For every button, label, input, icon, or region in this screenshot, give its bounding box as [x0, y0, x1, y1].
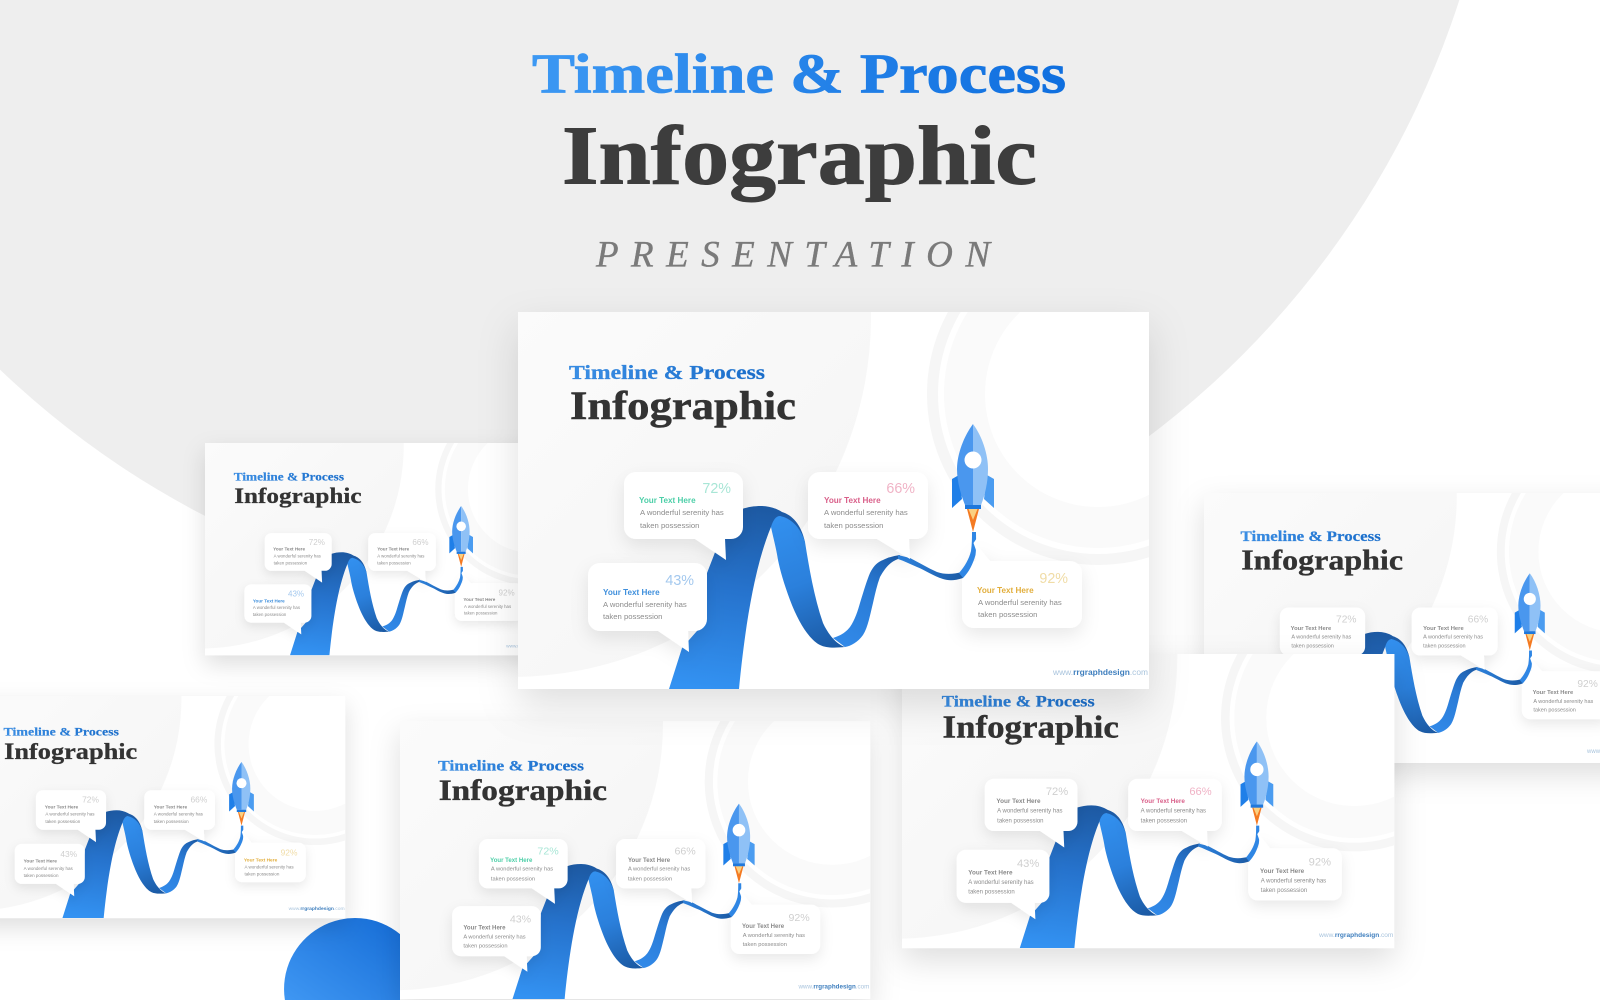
callout 72%: Your Text Here: [996, 798, 1041, 805]
callout 92%: 92%: [1039, 571, 1068, 587]
rocket: [952, 424, 994, 532]
callout 66%: 66%: [886, 481, 915, 497]
callout 66%: taken possession: [1141, 818, 1187, 824]
callout 72%: taken possession: [997, 818, 1044, 824]
callout 66%: taken possession: [154, 819, 189, 824]
callout 43%: Your Text Here: [1265, 692, 1306, 698]
callout 72%: Your Text Here: [639, 496, 696, 505]
callout 43%: 43%: [510, 913, 532, 925]
panel: front right slide: [616, 377, 1488, 948]
title: Timeline & Process: Timeline & Process: [532, 44, 1066, 106]
callout 66%: Your Text Here: [1423, 626, 1464, 632]
callout 43%: taken possession: [1265, 709, 1307, 715]
ribbon: [290, 552, 463, 655]
callout 72%: Your Text Here: [1291, 626, 1332, 632]
heading: Timeline & Process: [438, 758, 584, 774]
callout 72%: A wonderful serenity has: [1291, 634, 1352, 640]
callout 66%: A wonderful serenity has: [1141, 808, 1206, 814]
heading main: Infographic: [943, 709, 1119, 744]
callout 72%: taken possession: [491, 876, 535, 882]
callout 66%: A wonderful serenity has: [824, 508, 908, 517]
callout 66%: taken possession: [628, 876, 672, 882]
panel: back left slide: [198, 443, 518, 672]
callout 92%: Your Text Here: [1533, 690, 1574, 696]
callout 92%: taken possession: [743, 942, 787, 948]
callout 43%: A wonderful serenity has: [603, 600, 687, 609]
callout 43%: [957, 850, 1049, 919]
callout 92%: taken possession: [1261, 888, 1307, 894]
callout 43%: 43%: [665, 573, 694, 589]
callout 72%: 72%: [309, 538, 325, 547]
callout 72%: [985, 779, 1078, 847]
callout 43%: 43%: [60, 849, 78, 859]
callout 66%: [1128, 779, 1222, 847]
callout 72%: A wonderful serenity has: [640, 508, 724, 517]
callout 72%: [36, 790, 106, 842]
callout 72%: 72%: [537, 846, 559, 857]
callout 43%: taken possession: [968, 889, 1015, 895]
ribbon: [1020, 805, 1260, 948]
callout 92%: 92%: [281, 848, 298, 858]
callout 43%: Your Text Here: [463, 926, 506, 932]
callout 72%: A wonderful serenity has: [45, 812, 95, 817]
callout 92%: Your Text Here: [463, 597, 496, 602]
callout 66%: 66%: [674, 846, 696, 857]
callout 72%: [479, 839, 568, 904]
callout 92%: A wonderful serenity has: [1261, 879, 1326, 885]
callout 66%: [1412, 608, 1498, 670]
callout 92%: 92%: [499, 589, 515, 598]
callout 92%: [454, 590, 518, 626]
callout 43%: taken possession: [24, 873, 59, 878]
callout 72%: A wonderful serenity has: [491, 867, 553, 873]
callout 72%: 72%: [1046, 786, 1068, 798]
heading: Timeline & Process: [4, 725, 119, 738]
callout 72%: 72%: [1336, 615, 1357, 626]
callout 43%: taken possession: [463, 943, 508, 949]
rocket: [1241, 741, 1273, 826]
callout 92%: Your Text Here: [742, 924, 785, 930]
callout 72%: taken possession: [1291, 644, 1334, 650]
footer url: www.rrgraphdesign.com: [797, 984, 869, 991]
callout 43%: [15, 844, 85, 896]
callout 43%: A wonderful serenity has: [253, 605, 300, 610]
callout 92%: taken possession: [464, 611, 498, 616]
rocket: [1515, 573, 1545, 651]
callout 66%: taken possession: [1423, 644, 1466, 650]
callout 66%: taken possession: [377, 561, 411, 566]
callout 92%: A wonderful serenity has: [244, 865, 294, 870]
callout 66%: 66%: [1468, 615, 1488, 626]
callout 66%: A wonderful serenity has: [1423, 634, 1483, 640]
callout 92%: [235, 832, 306, 882]
callout 43%: 43%: [288, 590, 304, 599]
footer url: www.rrgraphdesign.com: [506, 643, 560, 649]
callout 66%: A wonderful serenity has: [628, 867, 690, 873]
callout 43%: 43%: [1310, 680, 1330, 691]
heading main: Infographic: [1241, 545, 1403, 577]
callout 92%: [1522, 658, 1600, 719]
callout 92%: taken possession: [1533, 707, 1576, 713]
callout 66%: 66%: [191, 795, 208, 805]
callout 92%: [962, 543, 1082, 628]
ribbon: [669, 506, 977, 689]
callout 72%: taken possession: [274, 561, 308, 566]
callout 92%: A wonderful serenity has: [1533, 699, 1594, 705]
rocket: [723, 804, 755, 883]
callout 92%: [1248, 834, 1342, 900]
footer url: www.rrgraphdesign.com: [1052, 667, 1148, 677]
callout 66%: A wonderful serenity has: [154, 812, 204, 817]
heading: Timeline & Process: [942, 693, 1095, 710]
title: Infographic: Infographic: [562, 110, 1037, 202]
heading main: Infographic: [439, 775, 607, 807]
panel: bottom middle slide: [390, 721, 880, 1000]
callout 72%: A wonderful serenity has: [274, 553, 321, 558]
ribbon: [512, 864, 742, 999]
callout 72%: [1278, 616, 1367, 654]
callout 43%: [588, 563, 707, 652]
callout 66%: taken possession: [824, 521, 883, 530]
background circle: [0, 0, 1502, 616]
callout 66%: [808, 472, 928, 559]
callout 66%: [616, 839, 705, 903]
callout 92%: Your Text Here: [1260, 868, 1305, 875]
heading main: Infographic: [570, 383, 796, 428]
subtitle: Presentation: PRESENTATION: [595, 234, 992, 276]
callout 72%: [624, 472, 743, 560]
callout 43%: A wonderful serenity has: [24, 866, 74, 871]
callout 92%: A wonderful serenity has: [743, 933, 805, 939]
callout 72%: 72%: [82, 795, 99, 805]
rocket: [229, 762, 254, 826]
callout 92%: Your Text Here: [244, 858, 278, 864]
callout 43%: A wonderful serenity has: [968, 880, 1034, 886]
callout 43%: taken possession: [253, 612, 287, 617]
callout 66%: Your Text Here: [377, 547, 410, 552]
callout 72%: [265, 533, 332, 583]
callout 43%: A wonderful serenity has: [463, 935, 526, 941]
callout 43%: 43%: [1017, 858, 1039, 870]
callout 43%: Your Text Here: [24, 859, 57, 865]
callout 92%: 92%: [1577, 679, 1598, 690]
callout 66%: A wonderful serenity has: [377, 553, 424, 558]
callout 66%: Your Text Here: [628, 858, 671, 864]
heading main: Infographic: [4, 739, 137, 765]
callout 92%: Your Text Here: [977, 586, 1034, 595]
callout 66%: 66%: [412, 538, 429, 547]
panel: bottom left slide: [0, 696, 352, 935]
callout 72%: A wonderful serenity has: [997, 808, 1063, 814]
ribbon: [1362, 632, 1532, 734]
callout 92%: taken possession: [244, 872, 280, 877]
callout 66%: Your Text Here: [154, 804, 187, 810]
footer url: www.rrgraphdesign.com: [1318, 932, 1394, 939]
callout 66%: [368, 533, 436, 582]
callout 92%: A wonderful serenity has: [978, 598, 1062, 607]
callout 92%: A wonderful serenity has: [464, 604, 511, 609]
callout 72%: 72%: [702, 481, 731, 497]
panel: main slide: [151, 0, 1269, 689]
panel: back right slide: [1194, 493, 1600, 784]
rocket: [449, 506, 473, 567]
callout 92%: 92%: [788, 912, 810, 924]
callout 43%: A wonderful serenity has: [1265, 700, 1325, 706]
callout 72%: Your Text Here: [490, 858, 533, 864]
callout 72%: Your Text Here: [273, 547, 305, 552]
callout 92%: taken possession: [978, 610, 1037, 619]
callout 43%: Your Text Here: [253, 598, 285, 603]
heading: Timeline & Process: [1241, 529, 1381, 545]
heading main: Infographic: [234, 483, 362, 508]
callout 66%: [144, 790, 215, 841]
callout 72%: taken possession: [640, 521, 699, 530]
heading: Timeline & Process: [234, 472, 345, 484]
footer url: www.rrgraphdesign.com: [289, 906, 345, 912]
callout 43%: [452, 906, 541, 972]
callout 43%: taken possession: [603, 612, 662, 621]
heading: Timeline & Process: [569, 362, 765, 384]
callout 66%: Your Text Here: [824, 496, 881, 505]
decorative blue circle: [284, 918, 400, 1000]
callout 92%: [731, 891, 820, 954]
callout 92%: 92%: [1309, 856, 1331, 868]
callout 72%: taken possession: [45, 819, 81, 824]
callout 66%: 66%: [1189, 786, 1212, 798]
callout 43%: Your Text Here: [968, 870, 1013, 877]
callout 72%: Your Text Here: [45, 804, 79, 810]
ribbon: [62, 810, 244, 918]
callout 43%: [1254, 673, 1339, 736]
callout 43%: [244, 584, 311, 634]
callout 43%: Your Text Here: [603, 588, 660, 597]
callout 66%: Your Text Here: [1141, 798, 1185, 805]
